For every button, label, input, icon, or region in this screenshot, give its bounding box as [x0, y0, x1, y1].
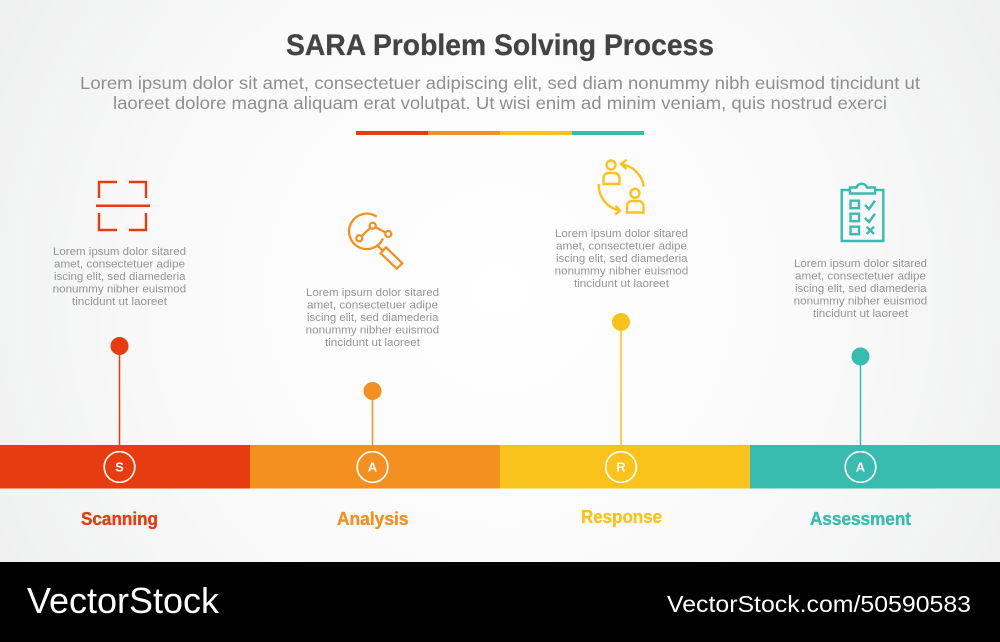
badge: A: A — [856, 460, 866, 475]
text: response description — [555, 228, 688, 290]
text: assessment description: amet, consectetuer adipe — [795, 270, 926, 282]
title: SARA Problem Solving Process — [286, 29, 714, 62]
badge: R: R — [616, 460, 626, 475]
icon: people exchange — [599, 160, 644, 214]
text: response description: tincidunt ut laoreet — [574, 278, 670, 290]
text: scanning description: iscing elit, sed diamederia — [54, 271, 186, 283]
badge: S — [104, 452, 135, 482]
badge: A — [845, 452, 876, 482]
badge: S: S — [115, 460, 124, 475]
badge: A — [357, 452, 388, 482]
text: scanning description: nonummy nibher euismod — [53, 284, 186, 296]
label: Assessment: Assessment — [810, 509, 911, 529]
text: response description: nonummy nibher euismod — [555, 266, 688, 278]
pin: scanning — [110, 337, 128, 446]
pin: response — [612, 313, 630, 446]
text: scanning description: Lorem ipsum dolor sitared — [53, 246, 186, 258]
label: Scanning: Scanning — [81, 509, 158, 529]
footer bar — [0, 562, 1000, 642]
footer url: VectorStock.com/50590583 — [667, 591, 971, 617]
label: Response: Response — [581, 507, 662, 527]
text: assessment description — [794, 258, 927, 320]
icon: magnifier with nodes — [349, 214, 402, 269]
text: response description: iscing elit, sed diamederia — [556, 253, 688, 265]
icon: scan frame — [96, 182, 150, 230]
text: scanning description: amet, consectetuer adipe — [54, 258, 185, 270]
text: analysis description — [306, 287, 439, 349]
text: analysis description: amet, consectetuer adipe — [307, 300, 438, 312]
subtitle — [80, 73, 920, 113]
badge: A: A — [368, 460, 378, 475]
text: response description: amet, consectetuer adipe — [556, 240, 687, 252]
text: assessment description: tincidunt ut laoreet — [813, 308, 909, 320]
text: scanning description: tincidunt ut laoreet — [72, 296, 168, 308]
icon: clipboard checklist — [842, 184, 883, 241]
pin: assessment — [852, 348, 870, 446]
text: assessment description: nonummy nibher euismod — [794, 296, 927, 308]
footer logo: VectorStock — [27, 580, 220, 621]
text: analysis description: nonummy nibher euismod — [306, 324, 439, 336]
text: analysis description: tincidunt ut laoreet — [325, 337, 421, 349]
text: assessment description: Lorem ipsum dolor sitared — [794, 258, 927, 270]
text: assessment description: iscing elit, sed diamederia — [795, 283, 927, 295]
label: Analysis: Analysis — [337, 509, 408, 529]
text: analysis description: Lorem ipsum dolor sitared — [306, 287, 439, 299]
timeline band — [0, 445, 1000, 488]
text: analysis description: iscing elit, sed diamederia — [307, 312, 439, 324]
title rule — [356, 131, 644, 135]
subtitle: Lorem ipsum dolor sit amet, consectetuer adipiscing elit, sed diam nonummy nibh euismod tincidunt ut — [80, 73, 920, 93]
panel: analysis — [306, 214, 439, 446]
panel: assessment — [794, 184, 927, 446]
pin: analysis — [364, 382, 382, 446]
badge: R — [606, 452, 636, 482]
text: response description: Lorem ipsum dolor sitared — [555, 228, 688, 240]
panel: response — [555, 160, 688, 446]
text: scanning description — [53, 246, 186, 308]
subtitle: laoreet dolore magna aliquam erat volutpat. Ut wisi enim ad minim veniam, quis nostrud exerci — [113, 93, 887, 113]
panel: scanning — [53, 182, 186, 446]
